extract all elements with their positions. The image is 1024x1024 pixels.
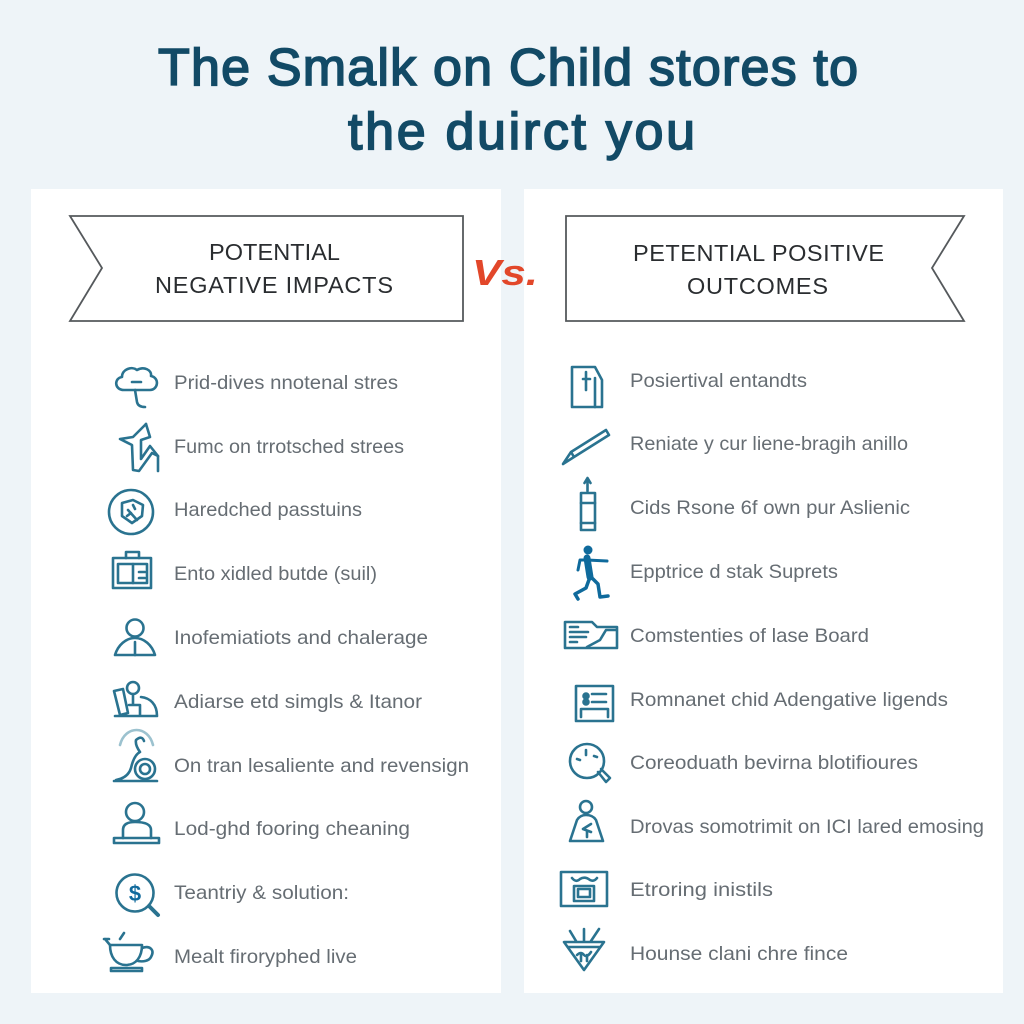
label: item 8: Drovas somotrimit on ICI lared emosing xyxy=(630,816,984,838)
label: item 4: Ento xidled butde (suil) xyxy=(174,563,377,585)
banner: positive outcomes: PETENTIAL POSITIVE xyxy=(633,240,884,266)
label: item 6: Adiarse etd simgls & Itanor xyxy=(174,691,423,713)
label: item 1: Posiertival entandts xyxy=(630,370,807,392)
label: item 1: Prid-dives nnotenal stres xyxy=(174,372,398,394)
title xyxy=(158,39,858,161)
versus mark: Vs. xyxy=(472,252,538,293)
banner: negative impacts xyxy=(70,216,463,321)
panel: positive outcomes xyxy=(524,189,1003,993)
banner: negative impacts: POTENTIAL xyxy=(209,239,340,265)
label: item 7: On tran lesaliente and revensign xyxy=(174,755,469,777)
label: item 9: Teantriy & solution: xyxy=(174,882,349,904)
banner: positive outcomes: OUTCOMES xyxy=(687,273,828,299)
icon: weight figure xyxy=(570,801,603,841)
label: item 5: Inofemiatiots and chalerage xyxy=(174,627,428,649)
icon: person xyxy=(115,620,155,655)
label: item 4: Epptrice d stak Suprets xyxy=(630,561,838,583)
label: item 6: Romnanet chid Adengative ligends xyxy=(630,689,948,711)
label: item 2: Fumc on trrotsched strees xyxy=(174,436,404,458)
icon: document xyxy=(572,367,602,407)
label: item 10: Mealt firoryphed live xyxy=(174,946,357,968)
label: item 3: Haredched passtuins xyxy=(174,499,362,521)
icon: shield badge xyxy=(109,490,153,534)
icon: funnel with rays xyxy=(564,929,604,970)
icon: person at desk xyxy=(114,682,157,716)
label: item 10: Hounse clani chre fince xyxy=(630,943,848,965)
banner: positive outcomes xyxy=(566,216,964,321)
icon: framed card xyxy=(576,686,613,721)
icon: case xyxy=(113,552,151,588)
icon: tube with arrow xyxy=(581,478,595,530)
label: item 2: Reniate y cur liene-bragih anillo xyxy=(630,433,908,455)
title: the duirct you xyxy=(348,103,695,161)
label: item 5: Comstenties of lase Board xyxy=(630,625,869,647)
icon: spiral figure xyxy=(114,730,157,781)
icon: gauge magnifier xyxy=(570,744,610,782)
icon: dollar magnifier: $ xyxy=(129,881,141,906)
label: item 3: Cids Rsone 6f own pur Aslienic xyxy=(630,497,910,519)
icon: folder xyxy=(565,622,617,648)
title: The Smalk on Child stores to xyxy=(158,39,858,97)
label: item 8: Lod-ghd fooring cheaning xyxy=(174,818,410,840)
panel: negative impacts xyxy=(31,189,501,993)
icon: framed device xyxy=(561,872,607,906)
icon: dollar magnifier xyxy=(116,874,158,915)
icon: cloud xyxy=(116,368,157,407)
label: item 9: Etroring inistils xyxy=(630,879,773,901)
icon: animal figure xyxy=(120,424,158,471)
banner: negative impacts: NEGATIVE IMPACTS xyxy=(155,272,393,298)
icon: person behind counter xyxy=(114,803,159,843)
label: item 7: Coreoduath bevirna blotifioures xyxy=(630,752,918,774)
icon: cup xyxy=(104,933,152,971)
icon: pencil xyxy=(563,430,609,464)
icon: walking figure xyxy=(575,546,608,599)
